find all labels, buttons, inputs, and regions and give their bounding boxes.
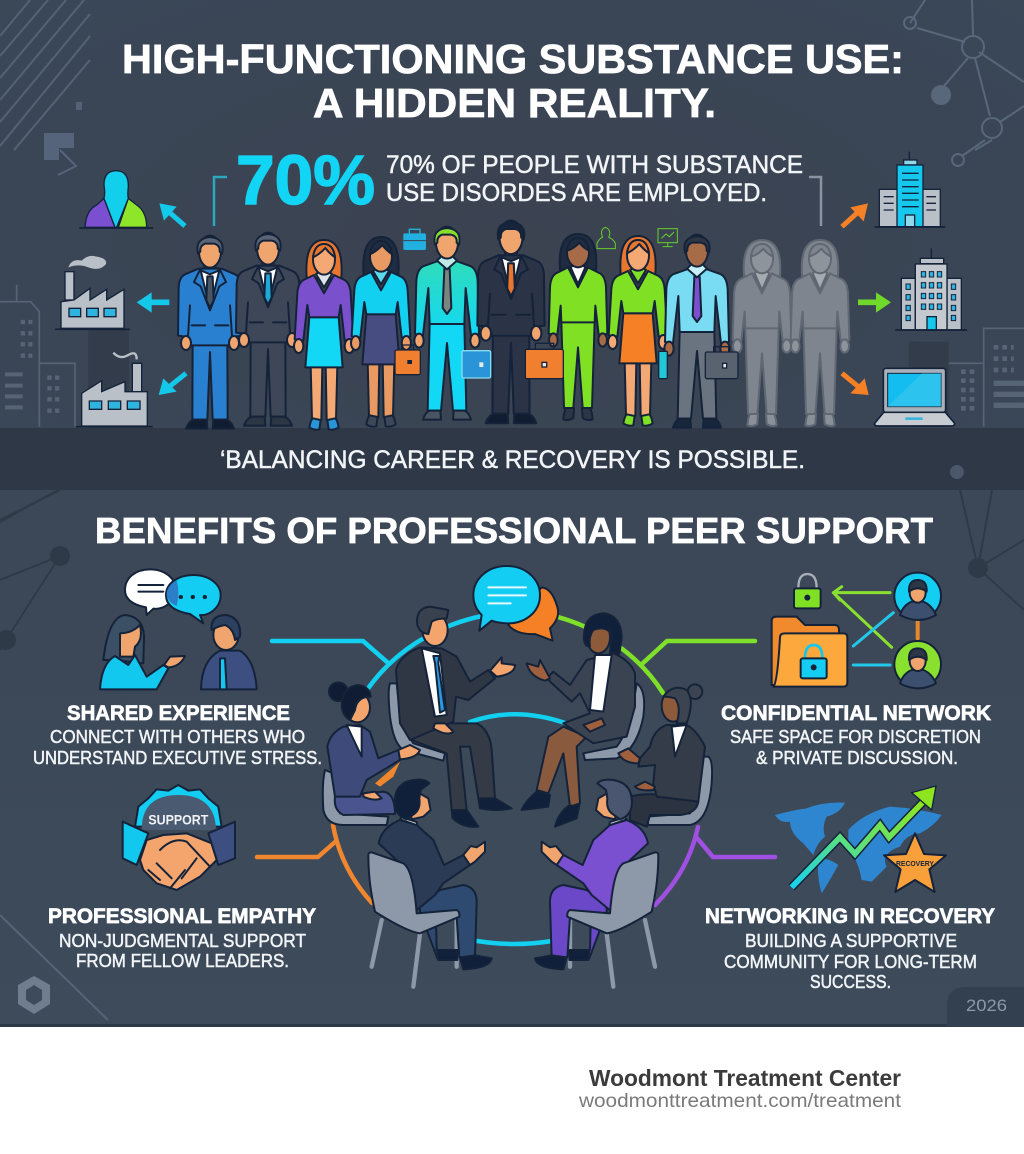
decoration: bottom strip bbox=[0, 1024, 1024, 1027]
man seen from behind left bbox=[368, 780, 492, 987]
panel: top section background bbox=[0, 0, 1024, 490]
ring arc purple bbox=[655, 827, 698, 905]
icon: two people talking bbox=[100, 569, 257, 689]
decoration: band node bbox=[950, 465, 964, 479]
speech bubbles bbox=[473, 566, 558, 641]
heading: CONFIDENTIAL NETWORK bbox=[721, 702, 991, 725]
description: NON-JUDGMENTAL SUPPORT bbox=[59, 930, 306, 951]
description: BUILDING A SUPPORTIVE bbox=[745, 930, 957, 951]
stat: 70 percent: 70% bbox=[236, 141, 375, 219]
section heading: BENEFITS OF PROFESSIONAL PEER SUPPORT bbox=[95, 510, 933, 551]
icon: factory lower bbox=[76, 353, 153, 427]
block: shared experience bbox=[33, 569, 322, 768]
arrows: left side bbox=[137, 203, 186, 395]
icon: folder, locks and linked people bbox=[772, 573, 941, 688]
ring arc green bbox=[558, 617, 663, 693]
icon: office tower bbox=[875, 152, 945, 227]
title: HIGH-FUNCTIONING SUBSTANCE USE: bbox=[122, 36, 904, 82]
floor band bbox=[0, 428, 1024, 490]
description: UNDERSTAND EXECUTIVE STRESS. bbox=[33, 747, 322, 768]
person 9 light blue shirt bbox=[664, 235, 730, 428]
person 10 faded bbox=[733, 240, 791, 426]
woman with hair bun left bbox=[323, 682, 420, 825]
ring arc inner bbox=[470, 714, 565, 723]
icon: person in robe bbox=[79, 171, 153, 228]
ring arc orange bbox=[333, 825, 372, 903]
description: COMMUNITY FOR LONG-TERM bbox=[724, 951, 977, 972]
title bbox=[122, 36, 904, 126]
decoration: network nodes right bbox=[960, 490, 1024, 610]
block: professional empathy bbox=[48, 785, 316, 971]
person 4 cyan blouse bbox=[351, 237, 411, 427]
decoration: arrow mark bbox=[44, 133, 76, 175]
stat description: 70% OF PEOPLE WITH SUBSTANCE bbox=[386, 151, 803, 179]
woman in dark jacket bbox=[522, 613, 644, 827]
person 2 grey suit bbox=[236, 233, 300, 426]
description: & PRIVATE DISCUSSION. bbox=[756, 747, 958, 768]
ring arc cyan bottom bbox=[477, 941, 552, 944]
star label: RECOVERY bbox=[896, 859, 934, 868]
ring and connectors bbox=[257, 616, 775, 944]
title: A HIDDEN REALITY. bbox=[313, 80, 716, 126]
description bbox=[724, 930, 977, 992]
tagline: ‘BALANCING CAREER & RECOVERY IS POSSIBLE. bbox=[220, 446, 805, 474]
connector green bbox=[643, 641, 755, 663]
description: SUCCESS. bbox=[810, 971, 891, 992]
description bbox=[59, 930, 306, 971]
person 3 purple blouse bbox=[294, 240, 354, 430]
person 7 green suit bbox=[549, 234, 607, 420]
man with blue tie bbox=[389, 607, 515, 827]
description bbox=[33, 726, 322, 768]
person 11 faded bbox=[791, 240, 849, 426]
icon: hexagon logo bbox=[18, 976, 50, 1014]
connector purple bbox=[697, 838, 775, 857]
ring arc cyan top bbox=[367, 616, 482, 690]
icon: support handshake bbox=[123, 785, 235, 890]
heading: PROFESSIONAL EMPATHY bbox=[48, 905, 316, 928]
seated group illustration bbox=[323, 566, 712, 987]
footer: organisation name: Woodmont Treatment Center bbox=[589, 1065, 901, 1091]
person 8 green blouse bbox=[608, 236, 668, 426]
arrows: right side bbox=[842, 203, 891, 395]
icon: factory upper bbox=[55, 256, 130, 329]
description bbox=[730, 726, 981, 768]
woman with hair bun right bbox=[618, 684, 712, 827]
block: confidential network bbox=[721, 573, 991, 768]
man seen from behind right bbox=[535, 780, 658, 987]
badge text: SUPPORT bbox=[148, 811, 209, 827]
person 6 dark suit bbox=[477, 221, 545, 423]
stat description bbox=[386, 151, 803, 207]
year: 2026 bbox=[966, 997, 1007, 1015]
decoration: city skyline right bbox=[909, 328, 1024, 427]
year tab bbox=[947, 987, 1024, 1027]
bracket: left bbox=[214, 177, 227, 226]
description: CONNECT WITH OTHERS WHO bbox=[50, 726, 305, 747]
icon: world map, growth arrow and star bbox=[775, 786, 946, 893]
decoration: network nodes top right bbox=[904, 0, 1024, 166]
person 1 blue suit bbox=[178, 236, 242, 429]
block: networking in recovery bbox=[705, 786, 995, 992]
people: row of professionals bbox=[178, 221, 849, 430]
icon: laptop bbox=[875, 368, 955, 426]
briefcases and small icons bbox=[395, 229, 491, 378]
stat description: USE DISORDES ARE EMPLOYED. bbox=[386, 179, 767, 207]
connector cyan bbox=[272, 641, 387, 662]
panel: lower section background bbox=[0, 490, 1024, 1027]
description: SAFE SPACE FOR DISCRETION bbox=[730, 726, 981, 747]
person 5 teal shirt bbox=[414, 227, 480, 420]
footer: url: woodmonttreatment.com/treatment bbox=[578, 1090, 902, 1112]
heading: SHARED EXPERIENCE bbox=[67, 702, 290, 725]
heading: NETWORKING IN RECOVERY bbox=[705, 905, 995, 928]
decoration: network nodes left bbox=[0, 490, 108, 1020]
decoration: diagonal stripes bbox=[0, 0, 90, 150]
description: FROM FELLOW LEADERS. bbox=[76, 950, 289, 971]
connector orange bbox=[257, 842, 335, 857]
icon: office block bbox=[895, 248, 967, 330]
bracket: right bbox=[809, 177, 821, 226]
decoration: city skyline left bbox=[0, 285, 129, 427]
